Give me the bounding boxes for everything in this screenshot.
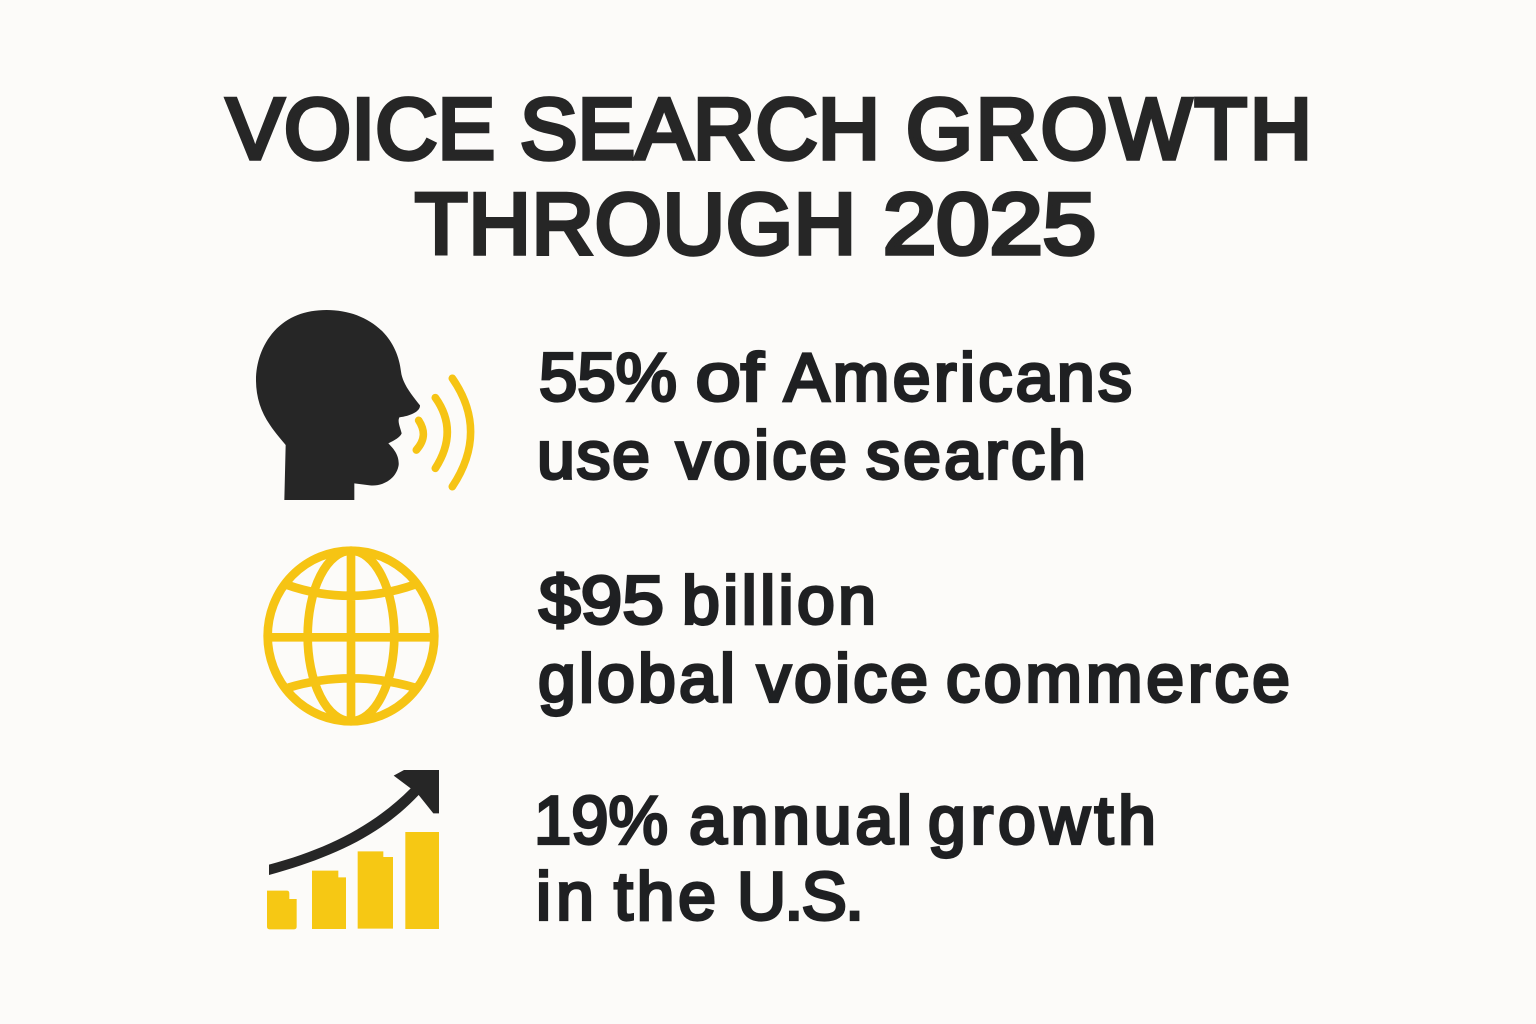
icon: growth chart [267, 770, 439, 929]
icon: globe [268, 551, 434, 721]
text: $95 billion: voice [757, 640, 928, 716]
text: 55% of Americans: use [537, 418, 650, 494]
text: 19% annual growth [534, 782, 1156, 934]
text: 55% of Americans: Americans [784, 340, 1132, 416]
icon: speaking head [256, 310, 471, 500]
title: SEARCH [520, 82, 880, 178]
text: $95 billion: billion [682, 562, 876, 638]
text: 19% annual growth: U.S. [737, 858, 864, 934]
text: 19% annual growth: 19% [534, 782, 668, 858]
title: 2025 [883, 176, 1096, 272]
text: 19% annual growth: growth [928, 782, 1156, 858]
text: 55% of Americans: voice [676, 418, 847, 494]
text: $95 billion: $95 [539, 562, 664, 638]
text: 19% annual growth: the [614, 858, 716, 934]
title: VOICE [226, 82, 495, 178]
title: GROWTH [906, 82, 1312, 178]
text: 19% annual growth: annual [689, 782, 912, 858]
text: $95 billion [538, 562, 1290, 716]
text: 55% of Americans: 55% [539, 340, 677, 416]
text: 19% annual growth: in [536, 858, 594, 934]
text: 55% of Americans: search [866, 418, 1086, 494]
text: 55% of Americans: of [696, 340, 764, 416]
title [226, 82, 1312, 272]
title: THROUGH [415, 176, 856, 272]
text: 55% of Americans [537, 340, 1132, 494]
text: $95 billion: global [538, 640, 735, 716]
text: $95 billion: commerce [946, 640, 1290, 716]
